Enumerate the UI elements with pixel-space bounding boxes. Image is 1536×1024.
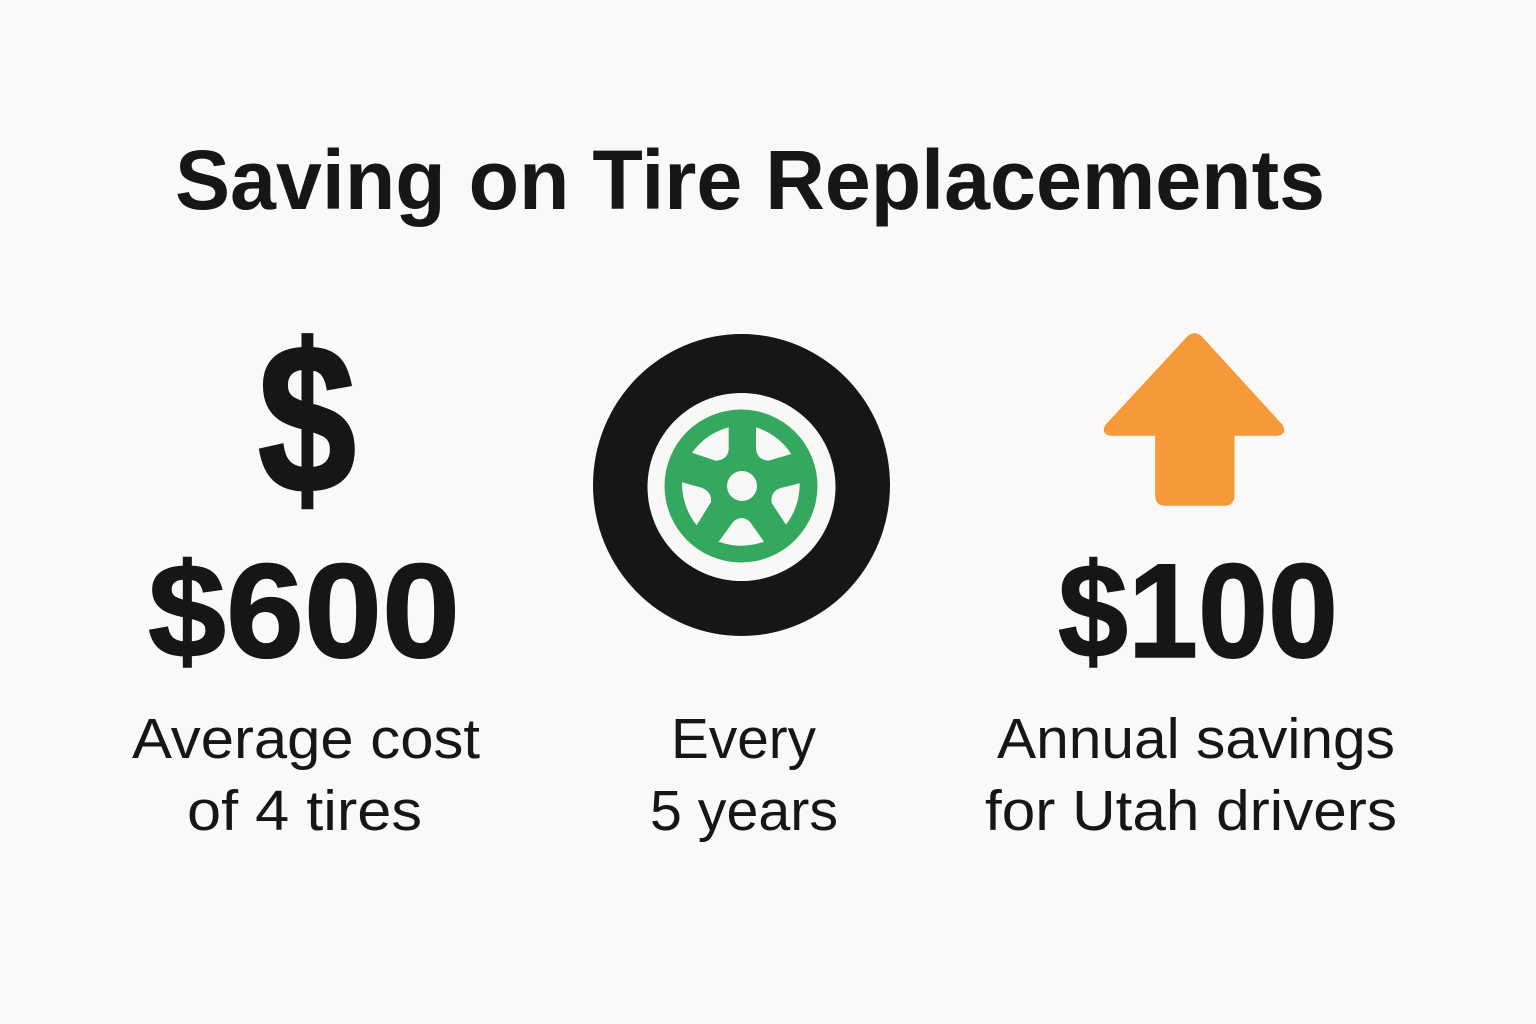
title: Saving on Tire Replacements — [175, 133, 1325, 227]
icon: orange up arrow — [1104, 334, 1284, 505]
panel: cost — [132, 300, 480, 843]
cost caption — [132, 707, 480, 843]
cost caption: of 4 tires — [187, 779, 422, 843]
interval caption: 5 years — [650, 779, 838, 843]
icon: tire with green wheel — [593, 334, 890, 636]
interval caption: Every — [671, 707, 816, 771]
savings caption — [985, 707, 1397, 843]
icon: dollar sign: $ — [258, 300, 356, 537]
panel: replacement interval — [593, 334, 890, 843]
interval caption — [650, 707, 838, 843]
cost figure: $600 — [148, 537, 460, 686]
savings caption: Annual savings — [997, 707, 1395, 771]
savings caption: for Utah drivers — [985, 779, 1397, 843]
panel: savings — [985, 334, 1397, 843]
cost caption: Average cost — [132, 707, 480, 771]
savings figure: $100 — [1058, 537, 1338, 686]
